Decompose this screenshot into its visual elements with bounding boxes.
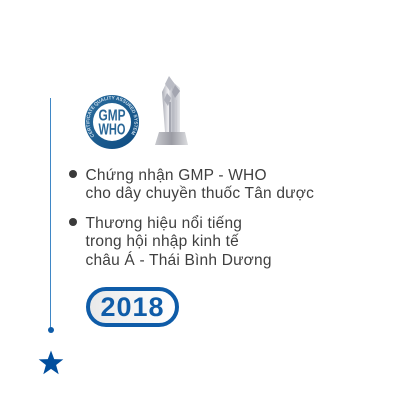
year badge: 2018 bbox=[100, 292, 165, 322]
icon: GMP WHO badge: GMP bbox=[98, 108, 126, 124]
bullet 2 bbox=[69, 218, 77, 226]
text: GMP certification bbox=[86, 167, 314, 202]
bullet 1 bbox=[69, 170, 77, 178]
text: famous brand bbox=[86, 215, 272, 269]
text: famous brand: Thương hiệu nổi tiếng bbox=[86, 215, 242, 232]
icon: trophy bbox=[155, 76, 188, 145]
text: famous brand: trong hội nhập kinh tế bbox=[86, 233, 239, 250]
text: famous brand: châu Á - Thái Bình Dương bbox=[86, 252, 272, 269]
icon: GMP WHO badge: CERTIFICATE QUALITY ASSURED SYSTEM bbox=[86, 96, 138, 138]
icon: star bbox=[38, 350, 64, 374]
text: GMP certification: cho dây chuyền thuốc Tân dược bbox=[86, 185, 314, 202]
icon: GMP WHO badge: WHO bbox=[98, 122, 126, 138]
year badge bbox=[86, 287, 179, 327]
text: GMP certification: Chứng nhận GMP - WHO bbox=[86, 167, 267, 184]
timeline dot bbox=[48, 327, 54, 333]
timeline line bbox=[50, 98, 51, 330]
